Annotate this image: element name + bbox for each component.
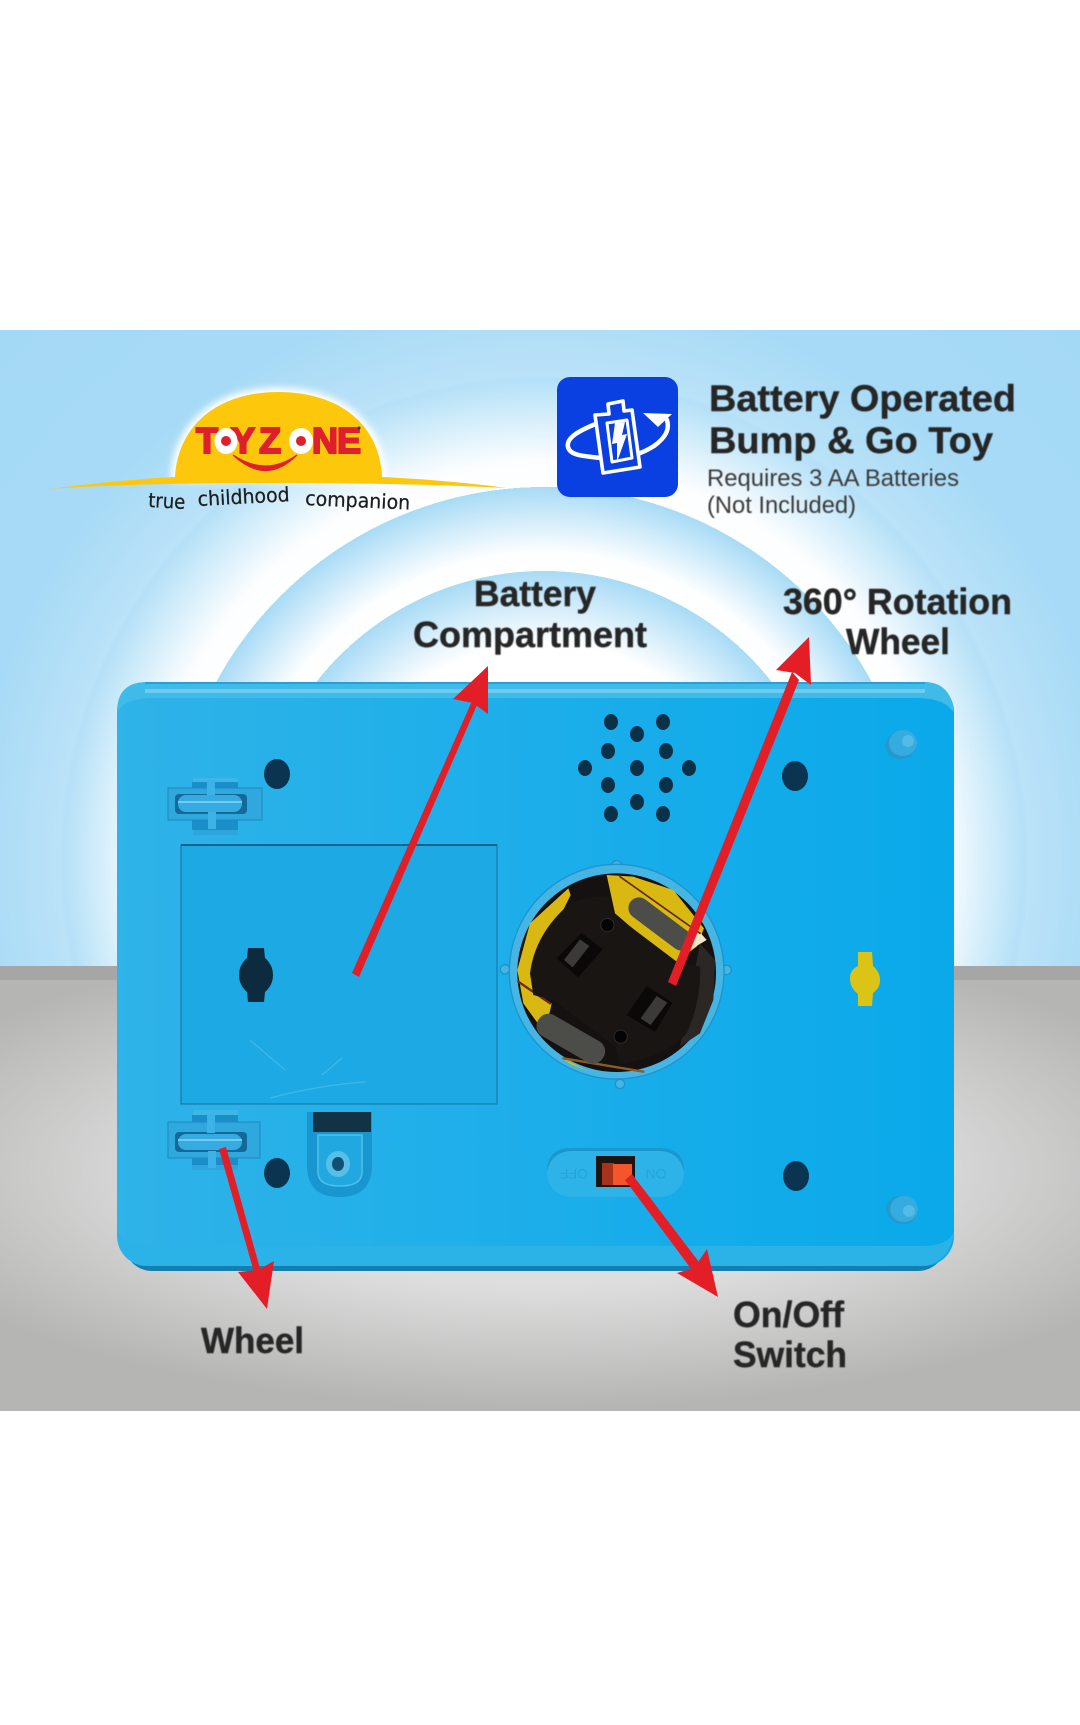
toy bottom rim bbox=[117, 1232, 954, 1266]
360 rotation wheel assembly bbox=[500, 861, 731, 1089]
logo tagline: companion bbox=[305, 486, 411, 515]
battery inner cell bbox=[607, 420, 632, 462]
toy body bbox=[117, 682, 954, 1271]
arrow: battery compartment bbox=[352, 666, 488, 977]
label: on/off switch: Switch bbox=[733, 1334, 847, 1375]
grey side block bbox=[680, 943, 715, 1047]
label: battery compartment bbox=[413, 573, 647, 655]
disc screw holes bbox=[601, 918, 614, 932]
label: 360 rotation wheel: 360° Rotation bbox=[783, 581, 1012, 622]
toy lower dark edge bbox=[124, 1180, 946, 1271]
wheel ring bbox=[500, 861, 731, 1089]
logo wordmark: Z bbox=[259, 420, 281, 461]
toy top rim bbox=[117, 682, 953, 712]
wheel: top left bbox=[168, 778, 262, 835]
wires bbox=[518, 877, 700, 1072]
compartment latch bbox=[307, 1112, 372, 1197]
logo wordmark: O bbox=[295, 431, 311, 453]
text: battery requirement bbox=[707, 465, 959, 519]
logo wordmark: N bbox=[312, 420, 338, 461]
label: on/off switch: On/Off bbox=[733, 1294, 845, 1335]
logo tagline: childhood bbox=[197, 482, 290, 511]
screw holes bbox=[264, 759, 809, 1191]
arrow: wheel bbox=[219, 1147, 274, 1309]
heading: battery operated: Battery Operated bbox=[709, 377, 1016, 419]
keyhole slot bbox=[239, 948, 273, 1002]
black motor plate bbox=[530, 896, 700, 1064]
label: battery compartment: Battery bbox=[474, 573, 596, 614]
label: on/off switch bbox=[733, 1294, 847, 1375]
logo glow bbox=[175, 392, 382, 477]
cover scratches bbox=[250, 1040, 365, 1098]
white patch bbox=[690, 928, 707, 950]
logo swoosh and dome bbox=[50, 392, 507, 489]
arrow: 360 rotation wheel bbox=[668, 637, 811, 986]
label: 360 rotation wheel bbox=[783, 581, 1012, 662]
text: battery requirement: Requires 3 AA Batteries bbox=[707, 465, 959, 492]
battery knockout bbox=[595, 401, 640, 473]
logo smile bbox=[233, 455, 297, 470]
logo wordmark: Y bbox=[231, 420, 255, 461]
arrow: on/off switch bbox=[625, 1174, 718, 1297]
logo wordmark: T bbox=[196, 420, 218, 461]
logo eyes bbox=[214, 428, 313, 454]
logo wordmark: E bbox=[337, 420, 361, 461]
text: battery requirement: (Not Included) bbox=[707, 492, 856, 519]
arrow head bbox=[643, 413, 672, 427]
heading: battery operated: Bump & Go Toy bbox=[709, 419, 993, 461]
logo tagline: true bbox=[148, 488, 186, 514]
heading: battery operated bbox=[709, 377, 1016, 461]
icon: battery with rotation arrow bbox=[557, 377, 678, 497]
lightning bolt bbox=[612, 422, 627, 462]
toy main plate bbox=[117, 682, 954, 1266]
label: wheel: Wheel bbox=[201, 1320, 304, 1361]
yellow circuit board bbox=[517, 875, 704, 1071]
rubber rollers bbox=[532, 893, 696, 1068]
dark interior bbox=[517, 873, 716, 1072]
on/off switch: OFF bbox=[560, 1166, 588, 1182]
logo registered mark bbox=[358, 426, 360, 430]
logo tagline bbox=[148, 482, 411, 515]
right side pegs and yellow pin bbox=[850, 727, 921, 1228]
speaker grille bbox=[578, 714, 696, 822]
panel: sky backdrop with concentric arches bbox=[0, 330, 1080, 967]
logo: Toyzone bbox=[50, 392, 507, 515]
battery compartment cover bbox=[181, 845, 497, 1104]
label: battery compartment: Compartment bbox=[413, 614, 647, 655]
label: 360 rotation wheel: Wheel bbox=[846, 621, 950, 662]
wheel: bottom left bbox=[168, 1110, 260, 1170]
logo wordmark: O bbox=[218, 431, 234, 453]
orbit bbox=[568, 420, 668, 459]
disc slots bbox=[557, 933, 673, 1032]
on/off switch bbox=[547, 1148, 684, 1197]
panel: grey floor bbox=[0, 966, 1080, 1411]
on/off switch: ON bbox=[646, 1166, 666, 1182]
